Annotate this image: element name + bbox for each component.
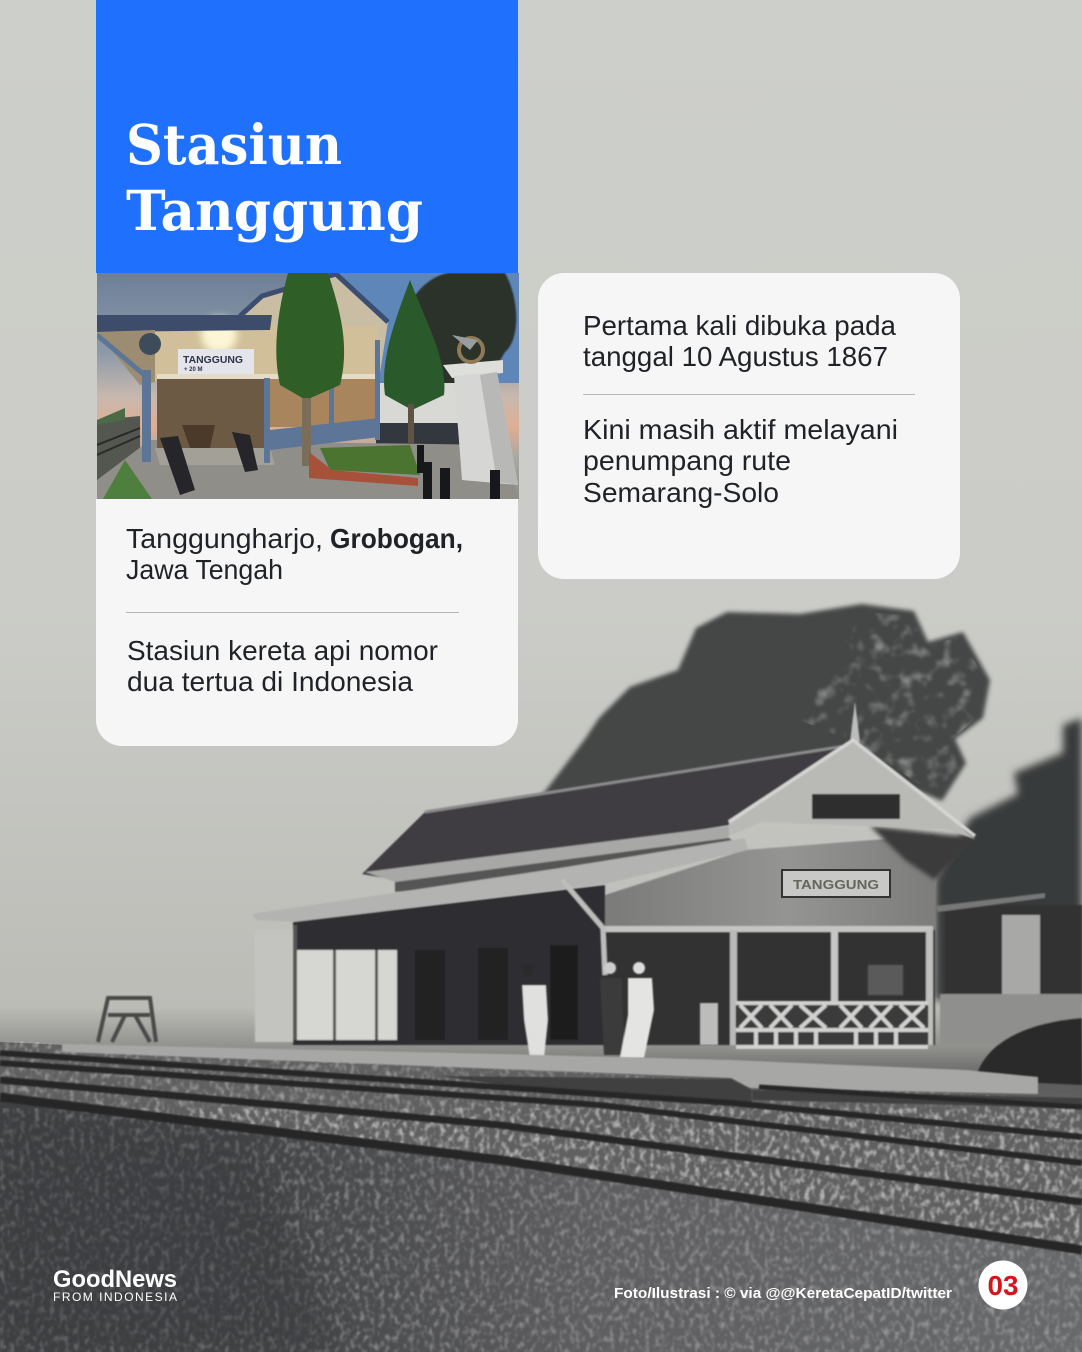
handcart at left — [98, 998, 156, 1042]
blue sky right — [340, 273, 519, 383]
motorcycles — [160, 425, 258, 495]
right tree — [384, 280, 444, 410]
white boards — [295, 950, 397, 1040]
fence — [270, 418, 380, 450]
gable — [729, 740, 975, 839]
text: location: Jawa Tengah — [126, 554, 283, 585]
speaker — [139, 333, 161, 355]
text: opening date: tanggal 10 Agustus 1867 — [583, 341, 888, 372]
title: Stasiun — [126, 112, 342, 177]
platform — [62, 1044, 1038, 1094]
platform shadow — [440, 1076, 752, 1104]
text: current service: penumpang rute — [583, 445, 791, 476]
posts — [142, 340, 380, 463]
sign — [178, 349, 254, 374]
distant tree behind station — [540, 600, 1000, 815]
text: location: Tanggungharjo, — [126, 523, 323, 554]
porch interior — [270, 379, 375, 427]
station front wall — [150, 326, 378, 381]
station sign: TANGGUNG — [793, 877, 879, 892]
sign: + 20 M — [184, 367, 203, 373]
background: historic black and white station photo — [0, 600, 1082, 1352]
photo credit: Foto/Ilustrasi : © via @@KeretaCepatID/twitter — [614, 1285, 952, 1302]
drain pipe — [562, 880, 605, 975]
canopy — [252, 838, 748, 922]
eave underside — [97, 330, 155, 385]
page number badge: 03 — [988, 1270, 1018, 1301]
text: opening date — [583, 310, 896, 372]
monument — [443, 335, 518, 485]
people on platform — [522, 962, 718, 1058]
eave roof — [97, 315, 272, 332]
background tree — [416, 273, 518, 383]
porch floor — [155, 448, 275, 465]
porch — [605, 930, 935, 1045]
garden — [320, 445, 420, 475]
title: Tanggung — [126, 178, 423, 243]
text: current service — [583, 414, 898, 508]
text: current service: Semarang-Solo — [583, 477, 779, 508]
logo: GoodNews From Indonesia: GoodNews — [53, 1266, 177, 1293]
rails — [0, 1053, 1082, 1250]
foreground grass — [0, 1100, 1082, 1352]
station building — [252, 702, 975, 1045]
rail tracks — [97, 416, 140, 486]
under-canopy dark wall — [293, 885, 605, 1045]
text: current service: Kini masih aktif melayani — [583, 414, 898, 445]
text: oldest station: dua tertua di Indonesia — [127, 666, 413, 697]
chain posts — [417, 445, 500, 499]
doors — [415, 950, 445, 1040]
porch railing — [736, 1003, 928, 1047]
white side wall — [380, 383, 458, 423]
logo: GoodNews From Indonesia: FROM INDONESIA — [53, 1290, 177, 1304]
text: oldest station — [127, 635, 438, 697]
text: location: Grobogan, — [330, 523, 463, 554]
photo: modern Tanggung station — [97, 273, 519, 499]
main wall — [605, 835, 935, 930]
title — [126, 112, 423, 243]
ground and rails — [0, 1040, 1082, 1352]
right side trees — [935, 718, 1082, 1000]
lower roof ledge — [365, 826, 729, 882]
annex building — [935, 893, 1082, 1085]
plant — [103, 460, 152, 499]
text: oldest station: Stasiun kereta api nomor — [127, 635, 438, 666]
station sign — [782, 870, 890, 897]
panel: blue title block — [96, 0, 518, 273]
panel: left info card — [96, 499, 518, 746]
roof — [362, 746, 845, 880]
panel: right info card — [538, 273, 960, 579]
text: location — [126, 523, 463, 585]
page number badge — [978, 1260, 1028, 1310]
text: opening date: Pertama kali dibuka pada — [583, 310, 896, 341]
shaded top of wall — [870, 826, 975, 880]
sign: TANGGUNG — [183, 355, 243, 366]
ground — [97, 440, 514, 488]
station gable — [245, 276, 388, 372]
left tree — [276, 273, 344, 400]
track bed — [0, 1042, 1082, 1352]
